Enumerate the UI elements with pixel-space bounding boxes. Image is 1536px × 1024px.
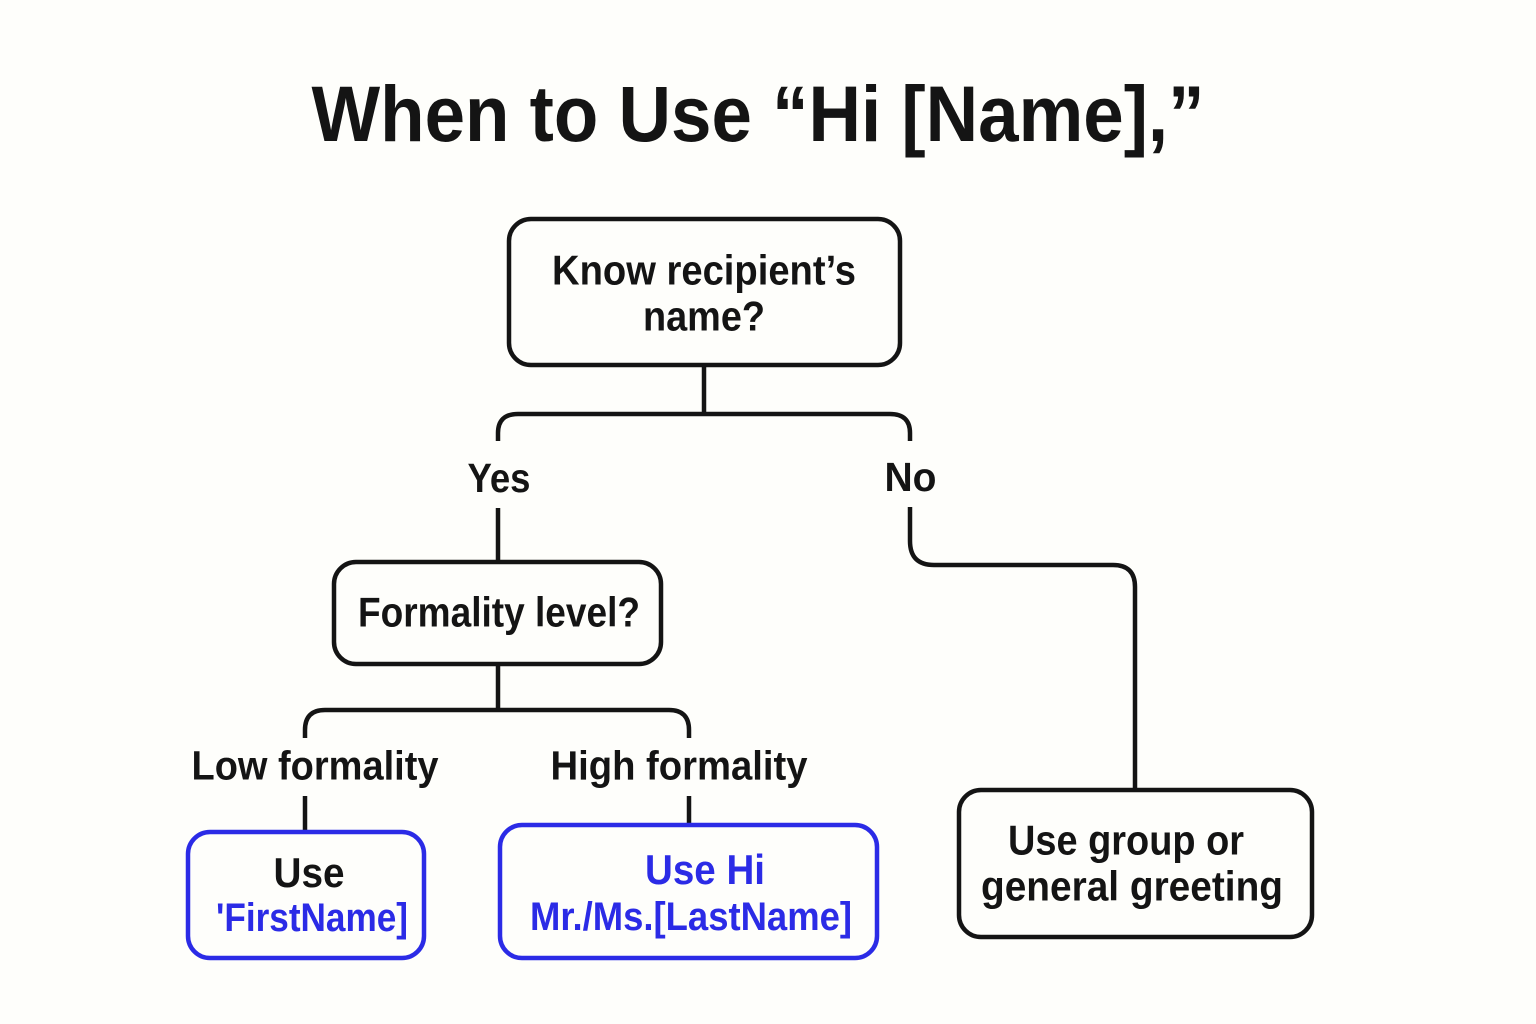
outcome box: group or general greeting: Use group or <box>1008 816 1244 864</box>
outcome box: use first name <box>188 832 424 958</box>
outcome box: use first name: 'FirstName] <box>216 896 408 940</box>
decision box: formality level: Formality level? <box>358 588 640 636</box>
decision box: know recipient's name <box>509 219 900 365</box>
label: yes: Yes <box>468 455 530 501</box>
decision box: know recipient's name: Know recipient’s <box>552 246 856 294</box>
outcome box: use first name: Use <box>274 849 344 896</box>
connector: name question to yes and no <box>498 365 910 441</box>
decision box: know recipient's name: name? <box>643 292 765 340</box>
connector: formality to low and high <box>305 664 689 738</box>
outcome box: group or general greeting: general greeting <box>981 862 1283 910</box>
arrow: high formality to last name <box>687 796 691 825</box>
outcome box: group or general greeting <box>959 790 1312 937</box>
label: no: No <box>884 454 936 500</box>
arrow: no to group greeting <box>910 507 1135 790</box>
arrow: low formality to first name <box>303 796 307 832</box>
outcome box: use hi last name: Mr./Ms.[LastName] <box>530 895 852 939</box>
outcome box: use hi last name: Use Hi <box>645 846 765 893</box>
label: high formality: High formality <box>550 742 808 788</box>
outcome box: use hi last name <box>500 825 877 958</box>
title: When to Use “Hi [Name],” <box>312 69 1204 158</box>
label: low formality: Low formality <box>192 742 439 788</box>
decision box: formality level <box>334 562 661 664</box>
arrow: yes to formality <box>496 508 500 562</box>
